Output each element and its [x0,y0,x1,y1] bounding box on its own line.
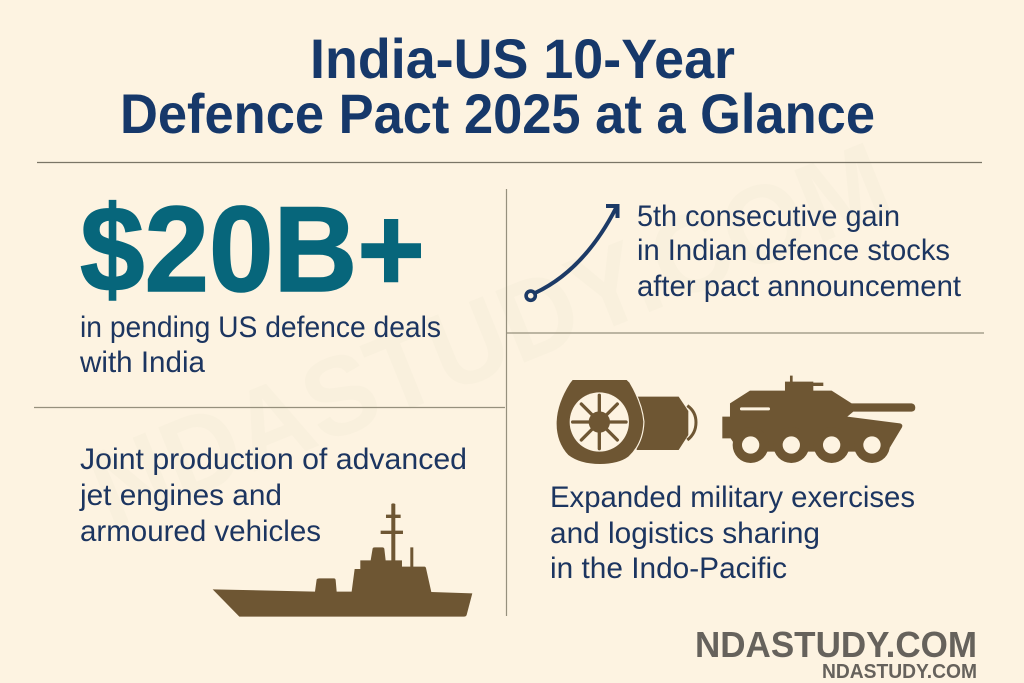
exercises text: and logistics sharing [550,517,820,550]
panel: $20B+ statistic [79,181,441,379]
icon: jet engine [557,380,696,464]
big number: $20B+ [80,181,425,317]
exercises text: Expanded military exercises [550,481,915,514]
panel: joint production [79,443,472,617]
exercises text [550,481,915,585]
production text [79,443,467,548]
production text: Joint production of advanced [80,443,467,476]
panel: defence stocks [526,200,962,303]
title: India-US 10-Year [310,27,735,90]
stat caption [79,311,441,379]
title [120,27,875,145]
production text: jet engines and [79,479,282,512]
brand watermark [695,624,977,683]
stat caption: with India [79,346,205,379]
stocks text: in Indian defence stocks [637,234,950,267]
panel: exercises and logistics [550,376,915,585]
stocks text: 5th consecutive gain [637,200,900,233]
icon: warship [213,503,472,617]
title: Defence Pact 2025 at a Glance [120,82,875,145]
stocks text: after pact announcement [637,270,962,303]
stocks text [637,200,962,303]
brand watermark: NDASTUDY.COM [822,661,977,683]
watermark: NDASTUDY.COM [72,118,907,552]
production text: armoured vehicles [80,515,321,548]
icon: armoured vehicle [722,376,915,463]
stat caption: in pending US defence deals [80,311,441,344]
exercises text: in the Indo-Pacific [550,552,787,585]
icon: rising arrow [526,206,618,300]
brand watermark: NDASTUDY.COM [695,624,977,665]
